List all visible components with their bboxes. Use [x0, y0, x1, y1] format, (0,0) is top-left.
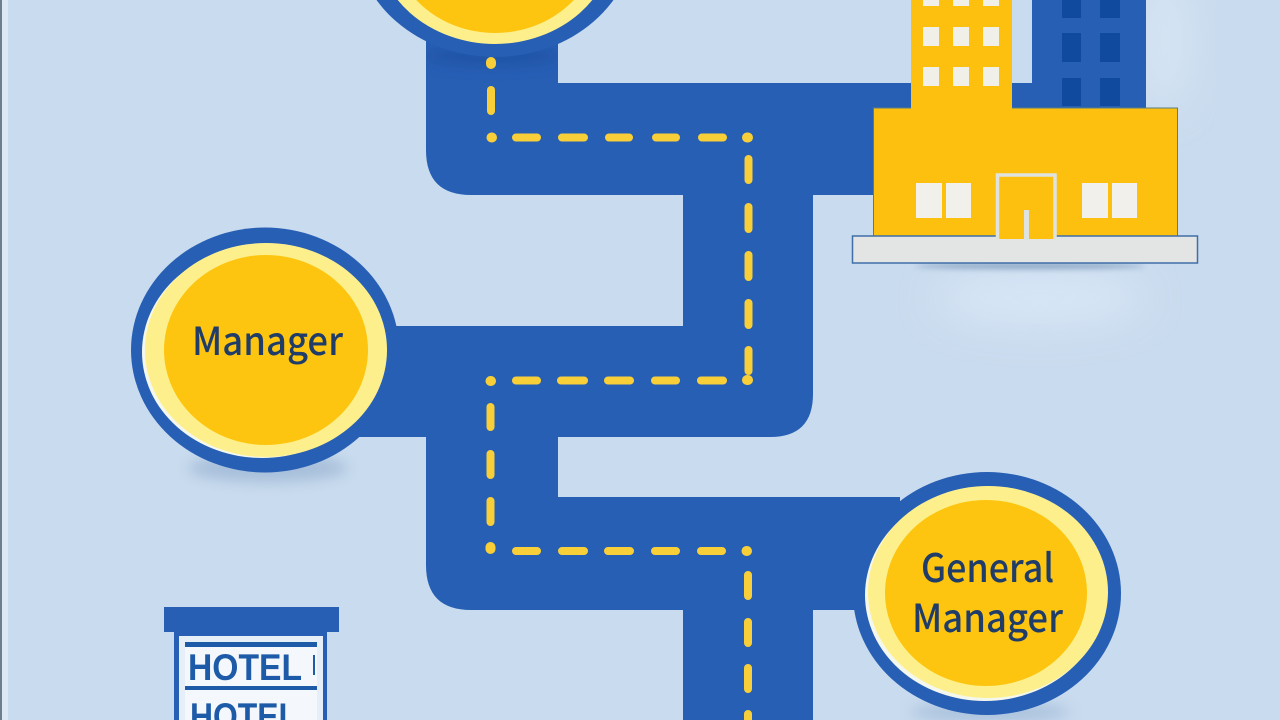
sign upper panel [185, 647, 317, 686]
left edge line [0, 0, 2, 720]
soft glow beside building [1140, 0, 1190, 110]
node: top (cropped) [355, 0, 635, 57]
sign top rule [185, 642, 317, 647]
node shadow: manager [188, 454, 348, 482]
blue tower windows [1062, 0, 1120, 106]
icon: hotel sign [164, 607, 339, 720]
soft glow under building [935, 272, 1145, 324]
text: HOTEL upper: HOTEL [188, 647, 302, 688]
sign lower rule [185, 686, 317, 690]
left edge highlight [2, 0, 8, 720]
label: Manager: Manager [192, 311, 344, 367]
sign body [174, 632, 327, 720]
road centre dashes [490, 90, 748, 720]
gold tower windows [923, 0, 999, 86]
plinth shadow [915, 263, 1145, 269]
icon: hotel building [852, 0, 1198, 269]
gold base [874, 108, 1178, 237]
gold tower [911, 0, 1012, 112]
label: General: General [921, 538, 1054, 594]
road connector behind building [880, 83, 1040, 143]
blue tower [1032, 0, 1146, 109]
winding road [380, 30, 900, 720]
door [998, 175, 1055, 240]
sign lower panel [185, 690, 317, 720]
plinth [852, 236, 1198, 263]
node: General Manager [853, 472, 1121, 715]
node: Manager [131, 228, 399, 472]
sign edge mark [313, 655, 315, 675]
road corner dots [490, 62, 748, 551]
node shadow: general manager [910, 702, 1070, 720]
label: Manager: Manager [912, 588, 1064, 644]
sign cap [164, 607, 339, 632]
base windows [916, 183, 1137, 218]
road shadow under top node [434, 50, 550, 66]
